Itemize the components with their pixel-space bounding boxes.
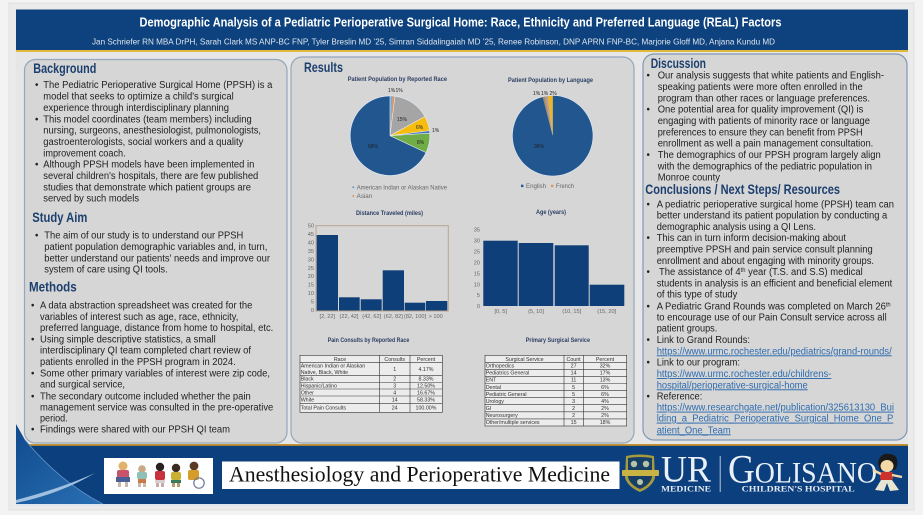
background bullets: • xyxy=(35,114,39,125)
discussion bullets: Monroe county xyxy=(658,173,720,184)
table: primary surgical service: 13% xyxy=(600,378,611,384)
bar chart: distance traveled: 40 xyxy=(308,240,314,246)
methods bullets: preferred language, distance from home to hospital, etc. xyxy=(40,323,273,334)
conclusions bullets: https://www.urmc.rochester.edu/pediatrics/grand-rounds/ xyxy=(657,346,892,357)
background bullets: improvement coach. xyxy=(43,148,126,159)
bar chart: distance traveled: 5 xyxy=(311,300,314,306)
background bullets: model that seeks to optimize a child's surgical xyxy=(43,92,234,102)
methods bullets xyxy=(31,301,273,436)
background bullets: studies that demonstrate which patient groups are xyxy=(43,182,251,193)
conclusions bullets: • xyxy=(646,391,650,402)
bar chart: age: [0, 5] xyxy=(494,309,507,315)
conclusions bullets: year (T.S. and S.S) medical xyxy=(746,267,863,278)
table: primary surgical service: 5 xyxy=(572,392,575,398)
UR Medicine logo: UR xyxy=(661,450,711,491)
discussion bullets: enrollment as well a pain management consultation. xyxy=(658,139,873,150)
study aim bullets xyxy=(35,230,271,276)
table: primary surgical service: 2 xyxy=(572,413,575,419)
conclusions bullets: • xyxy=(646,358,650,369)
background bullets: • xyxy=(35,160,39,171)
conclusions bullets: Link to our program: xyxy=(657,358,740,369)
methods bullets: • xyxy=(31,301,35,312)
discussion bullets xyxy=(646,71,884,184)
table: pain consults by reported race: 8.33% xyxy=(418,377,434,383)
bar chart: distance traveled xyxy=(308,210,448,320)
table: pain consults by reported race: 14 xyxy=(392,398,398,404)
pie chart: population by race: 1% xyxy=(388,88,396,94)
study aim bullets: better understand our patients' needs and improve our xyxy=(44,254,271,265)
conclusions bullets: Link to Grand Rounds: xyxy=(657,335,750,346)
conclusions bullets: lding_a_Pediatric_Perioperative_Surgical_Home_One_P xyxy=(657,414,893,425)
pie chart: population by race: 68% xyxy=(368,144,379,150)
heading: study aim: Study Aim xyxy=(32,210,87,225)
table: pain consults by reported race: 4 xyxy=(393,391,396,397)
table: primary surgical service: Percent xyxy=(596,357,615,363)
discussion bullets: speaking patients were more often enrolled in the xyxy=(658,82,863,93)
table: primary surgical service: 27 xyxy=(571,364,577,370)
discussion bullets: The demographics of our PPSH program largely align xyxy=(658,150,881,161)
methods bullets: • xyxy=(31,334,35,345)
table: primary surgical service: Pediatric General xyxy=(486,392,527,398)
heading: methods: Methods xyxy=(29,279,77,294)
pie chart: population by race: 6% xyxy=(416,125,424,131)
background bullets: gastroenterologists, social workers and a quality xyxy=(43,137,243,148)
bar chart: age: (15, 20] xyxy=(597,309,617,315)
bar chart: distance traveled: [2, 22] xyxy=(320,314,336,320)
bar chart: distance traveled: 35 xyxy=(308,249,314,255)
table: pain consults by reported race: 24 xyxy=(392,405,398,411)
bar chart: distance traveled: 20 xyxy=(308,274,314,280)
methods bullets: interdisciplinary QI team completed chart review of xyxy=(40,346,251,357)
table: primary surgical service: 6% xyxy=(601,385,609,391)
methods bullets: A data abstraction spreadsheet was created for the xyxy=(40,301,252,312)
heading: conclusions: Conclusions / Next Steps/ Resources xyxy=(645,182,840,197)
table: primary surgical service: 2 xyxy=(572,406,575,412)
panel: results xyxy=(291,57,634,443)
bar chart: age xyxy=(474,209,624,315)
table: primary surgical service: 18% xyxy=(600,420,611,426)
methods bullets: • xyxy=(31,391,35,402)
footer banner xyxy=(16,424,908,506)
bar chart: distance traveled: 45 xyxy=(308,232,314,238)
table: primary surgical service: 15 xyxy=(571,420,577,426)
title: Demographic Analysis of a Pediatric Perioperative Surgical Home: Race, Ethnicity and Preferred Language (REaL) Factors xyxy=(140,14,782,29)
table: primary surgical service: 3 xyxy=(572,399,575,405)
pie chart: population by language: 1% xyxy=(533,91,541,97)
table: pain consults by reported race: 58.33% xyxy=(417,398,435,404)
table: primary surgical service: Neurosurgery xyxy=(486,413,518,419)
pie chart: population by race: American Indian or Alaskan Native xyxy=(357,186,448,192)
header banner xyxy=(16,10,908,52)
conclusions bullets: • xyxy=(646,199,650,210)
bar chart: age: 10 xyxy=(474,282,480,288)
table: pain consults by reported race: 12.50% xyxy=(417,384,435,390)
methods bullets: The secondary outcome included whether the pain xyxy=(40,391,251,402)
table: primary surgical service: Count xyxy=(567,357,581,363)
study aim bullets: system of care using QI tools. xyxy=(44,265,168,276)
table: primary surgical service: Primary Surgical Service xyxy=(526,337,590,344)
table: primary surgical service: 2% xyxy=(601,413,609,419)
Golisano logo: CHILDREN'S HOSPITAL xyxy=(742,485,855,494)
table: pain consults by reported race: 2 xyxy=(393,377,396,383)
study aim bullets: • xyxy=(35,230,39,241)
bar chart: age: 30 xyxy=(474,238,480,244)
table: primary surgical service: Other/multiple services xyxy=(486,420,540,426)
conclusions bullets xyxy=(646,199,894,436)
background bullets: This model coordinates (team members) including xyxy=(43,114,252,125)
table: primary surgical service: 5 xyxy=(572,385,575,391)
bar chart: distance traveled: Distance Traveled (miles) xyxy=(356,210,423,217)
methods bullets: patients enrolled in the PPSH program in 2024. xyxy=(40,357,236,368)
conclusions bullets: The assistance of 4 xyxy=(659,267,743,278)
bar chart: distance traveled: 15 xyxy=(308,282,314,288)
background bullets xyxy=(35,80,273,205)
conclusions bullets: preemptive PPSH and pain service consult planning xyxy=(657,244,873,255)
bar chart: distance traveled: 30 xyxy=(308,258,314,264)
conclusions bullets: to encourage use of our Pain Consult service across all xyxy=(657,312,887,323)
department name: Anesthesiology and Perioperative Medicine xyxy=(229,462,610,487)
background bullets: served by such models xyxy=(43,194,139,205)
table: pain consults by reported race: 16.67% xyxy=(417,391,435,397)
methods bullets: and surgical service, xyxy=(40,380,125,391)
table: pain consults by reported race: 1 xyxy=(393,367,396,373)
table: primary surgical service: Pediatrics General xyxy=(486,371,529,377)
bar chart: age: (10, 15] xyxy=(562,309,582,315)
bar chart: age: 5 xyxy=(477,293,480,299)
bar chart: age: Age (years) xyxy=(536,209,566,216)
pie chart: population by language: 1% xyxy=(541,91,549,97)
table: primary surgical service: Surgical Service xyxy=(505,357,544,363)
table: primary surgical service: 11 xyxy=(571,378,576,384)
pie chart: population by language: French xyxy=(556,184,574,190)
heading: background: Background xyxy=(33,61,96,76)
pie chart: population by language: English xyxy=(526,184,546,190)
background bullets: Although PPSH models have been implemented in xyxy=(43,160,254,171)
bar chart: age: 25 xyxy=(474,250,480,256)
bar chart: age: 0 xyxy=(477,304,480,310)
table: pain consults by reported race: 4.17% xyxy=(418,367,434,373)
conclusions bullets: th xyxy=(741,268,746,274)
pie chart: population by language: 2% xyxy=(550,91,557,97)
bar chart: distance traveled: (42, 62] xyxy=(362,314,382,320)
heading: discussion: Discussion xyxy=(651,56,706,71)
methods bullets: • xyxy=(31,425,35,436)
pie chart: population by race: 15% xyxy=(397,117,408,123)
pie chart: population by race: Patient Population by Reported Race xyxy=(348,76,447,83)
icon: university shield xyxy=(622,454,659,492)
conclusions bullets: of this type of study xyxy=(657,290,737,301)
discussion bullets: Our analysis suggests that white patients and English- xyxy=(658,71,884,82)
table: primary surgical service: 17% xyxy=(600,371,611,377)
table: pain consults by reported race: 3 xyxy=(393,384,396,390)
pie chart: population by race: 1% xyxy=(432,128,440,134)
authors: Jan Schriefer RN MBA DrPH, Sarah Clark MS ANP-BC FNP, Tyler Breslin MD ’25, Simran Siddalingaiah MD ’25, Renee Robinson, DNP APRN FNP-BC, Marjorie Gloff MD, Anjana Kundu MD xyxy=(92,38,775,46)
table: primary surgical service: ENT xyxy=(486,378,497,384)
table: primary surgical service: GI xyxy=(486,406,491,412)
pie chart: population by race xyxy=(348,76,448,200)
table: pain consults by reported race: Pain Consults by Reported Race xyxy=(328,337,409,344)
study aim bullets: patient population demographic variables and, in turn, xyxy=(44,242,267,253)
bar chart: distance traveled: 50 xyxy=(308,224,314,230)
table: pain consults by reported race: Black xyxy=(301,377,314,383)
panel: discussion and conclusions xyxy=(643,54,907,440)
bar chart: distance traveled: (22, 42] xyxy=(340,314,359,320)
table: primary surgical service xyxy=(485,337,627,426)
conclusions bullets: students in analysis is an efficient and beneficial element xyxy=(657,278,893,289)
pie chart: population by language: 96% xyxy=(534,144,545,150)
conclusions bullets: atient_One_Team xyxy=(657,425,731,436)
methods bullets: management service was consulted in the pre-operative xyxy=(40,403,273,414)
methods bullets: variables of interest such as age, race, ethnicity, xyxy=(40,312,238,323)
methods bullets: Using simple descriptive statistics, a small xyxy=(40,334,216,345)
table: pain consults by reported race: American Indian or Alaskan xyxy=(301,364,365,370)
table: primary surgical service: Urology xyxy=(486,399,504,405)
discussion bullets: engaging with patients of minority race or language xyxy=(658,116,870,127)
bar chart: distance traveled: (62, 82] xyxy=(384,314,403,320)
table: pain consults by reported race: Percent xyxy=(417,357,436,363)
conclusions bullets: https://www.researchgate.net/publication/325613130_Bui xyxy=(657,403,894,414)
methods bullets: period. xyxy=(40,414,68,425)
methods bullets: Some other primary variables of interest were zip code, xyxy=(40,368,270,379)
background bullets: nursing, surgeons, anesthesiologist, pulmonologists, xyxy=(43,126,261,137)
table: pain consults by reported race: Native, Black, White xyxy=(301,370,348,376)
discussion bullets: One potential area for quality improvement (QI) is xyxy=(658,105,863,116)
table: primary surgical service: 4% xyxy=(601,399,609,405)
table: pain consults by reported race: White xyxy=(301,398,314,404)
table: pain consults by reported race: Total Pain Consults xyxy=(301,405,346,411)
table: primary surgical service: 32% xyxy=(600,364,611,370)
conclusions bullets: A pediatric perioperative surgical home (PPSH) team can xyxy=(657,199,894,210)
conclusions bullets: hospital/perioperative-surgical-home xyxy=(657,380,808,391)
background bullets: The Pediatric Perioperative Surgical Home (PPSH) is a xyxy=(43,80,273,91)
pie chart: population by language: Patient Population by Language xyxy=(508,77,593,84)
table: primary surgical service: Dental xyxy=(486,385,501,391)
study aim bullets: The aim of our study is to understand our PPSH xyxy=(44,230,243,241)
conclusions bullets: • xyxy=(646,335,650,346)
table: primary surgical service: 2% xyxy=(601,406,609,412)
methods bullets: Findings were shared with our PPSH QI team xyxy=(40,425,230,436)
bar chart: distance traveled: > 100 xyxy=(429,314,443,320)
table: pain consults by reported race: Other xyxy=(301,391,314,397)
icon: children illustration xyxy=(104,458,213,494)
conclusions bullets: • xyxy=(646,267,650,278)
conclusions bullets: Reference: xyxy=(657,391,702,402)
table: pain consults by reported race: Consults xyxy=(384,357,405,363)
conclusions bullets: This can in turn inform decision-making about xyxy=(657,233,846,244)
conclusions bullets: https://www.urmc.rochester.edu/childrens- xyxy=(657,369,831,380)
table: pain consults by reported race: Hispanic/Latino xyxy=(301,384,337,390)
conclusions bullets: • xyxy=(646,233,650,244)
bar chart: age: 35 xyxy=(474,228,480,234)
conclusions bullets: better understand its patient population by conducting a xyxy=(657,211,888,222)
discussion bullets: • xyxy=(646,150,650,161)
bar chart: distance traveled: 0 xyxy=(311,308,314,314)
background bullets: • xyxy=(35,80,39,91)
methods bullets: • xyxy=(31,368,35,379)
Golisano logo: GOLISANO xyxy=(728,447,877,492)
bar chart: age: 20 xyxy=(474,260,480,266)
bar chart: age: 15 xyxy=(474,272,480,278)
table: primary surgical service: 14 xyxy=(571,371,577,377)
background bullets: several children's hospitals, there are few published xyxy=(43,171,258,182)
pie chart: population by language xyxy=(508,77,593,190)
panel: background, study aim and methods xyxy=(24,60,287,443)
pie chart: population by race: Asian xyxy=(357,194,372,200)
discussion bullets: with the demographics of the pediatric population in xyxy=(657,161,872,172)
bar chart: age: (5, 10] xyxy=(528,309,544,315)
UR Medicine logo: MEDICINE xyxy=(661,485,711,494)
discussion bullets: preferences to ensure they can benefit from PPSH xyxy=(658,127,863,138)
background bullets: experience through interdisciplinary planning xyxy=(43,103,229,114)
table: primary surgical service: 6% xyxy=(601,392,609,398)
footer swoosh xyxy=(16,424,103,504)
discussion bullets: program than other races or language preferences. xyxy=(658,93,870,104)
conclusions bullets: • xyxy=(646,301,650,312)
pie chart: population by race: 1% xyxy=(396,88,403,94)
conclusions bullets: enrollment and about engaging with minority groups. xyxy=(657,256,874,267)
table: pain consults by reported race xyxy=(300,337,442,412)
discussion bullets: • xyxy=(646,71,650,82)
bar chart: distance traveled: (82, 100] xyxy=(404,314,426,320)
conclusions bullets: A Pediatric Grand Rounds was completed on March 26 xyxy=(657,301,893,312)
discussion bullets: • xyxy=(646,105,650,116)
conclusions bullets: patient groups. xyxy=(657,324,717,335)
bar chart: distance traveled: 25 xyxy=(308,266,314,272)
conclusions bullets: th xyxy=(886,302,891,308)
table: pain consults by reported race: 100.00% xyxy=(416,405,437,411)
conclusions bullets: demographic analysis using a QI Lens. xyxy=(657,222,816,233)
heading: results: Results xyxy=(304,60,343,75)
bar chart: distance traveled: 10 xyxy=(308,291,314,297)
table: pain consults by reported race: Race xyxy=(334,357,346,363)
pie chart: population by race: 8% xyxy=(417,140,425,146)
table: primary surgical service: Orthopedics xyxy=(486,364,515,370)
icon: boy mascot xyxy=(873,454,902,491)
